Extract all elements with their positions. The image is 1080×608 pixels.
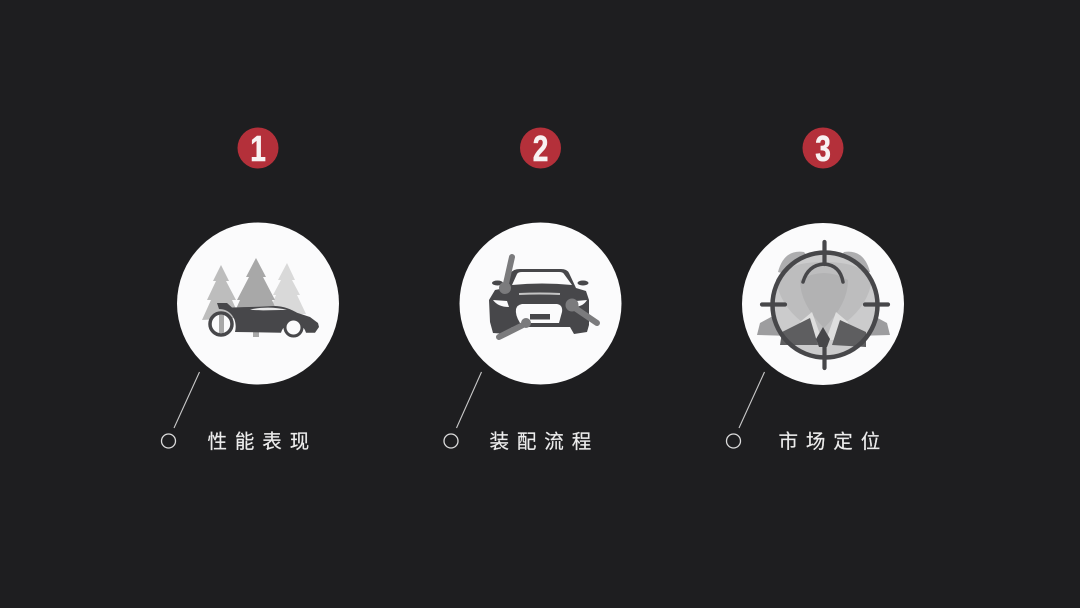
column 3: positioning	[726, 128, 904, 453]
number badge 3: 3	[815, 129, 831, 169]
white icon disc 1	[177, 222, 339, 384]
marker ring 1	[162, 434, 176, 448]
icon: car front with wrenches	[489, 257, 597, 337]
white icon disc 3	[742, 223, 904, 385]
marker ring 3	[726, 434, 740, 448]
marker ring 2	[444, 434, 458, 448]
column 1: performance	[162, 128, 339, 453]
number badge 1	[238, 128, 278, 169]
label 1: 性能表现	[208, 431, 317, 453]
leader line 3	[739, 372, 764, 428]
number badge 1: 1	[250, 129, 266, 169]
label 2: 装配流程	[490, 431, 599, 453]
leader line 1	[174, 372, 200, 428]
white icon disc 2	[460, 222, 622, 384]
icon: crosshair over business people	[757, 242, 890, 368]
number badge 2	[520, 128, 561, 169]
wrench top-left	[500, 257, 512, 294]
wrench bottom-left	[499, 318, 530, 337]
number badge 2: 2	[533, 129, 548, 169]
number badge 3	[802, 128, 844, 169]
wrench right	[566, 299, 597, 323]
leader line 2	[456, 372, 482, 428]
icon: car and pine trees	[202, 258, 319, 337]
label 3: 市场定位	[778, 431, 888, 453]
column 2: assembly	[444, 128, 622, 453]
